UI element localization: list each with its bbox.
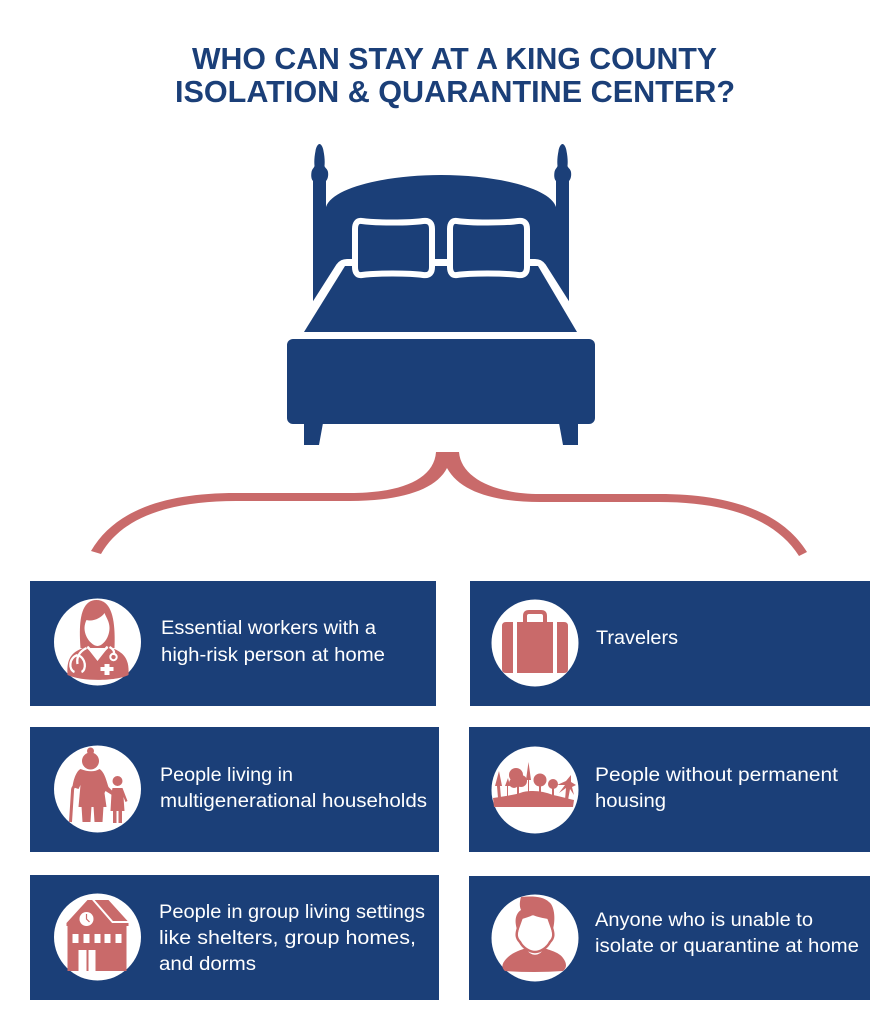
icon: building: like shelters, group homes, <box>159 928 416 949</box>
panel: people without permanent housing <box>469 727 870 852</box>
panel: essential workers <box>30 581 436 706</box>
icon: grandmother and child: People living in <box>160 765 293 786</box>
icon: building <box>54 894 425 980</box>
title: WHO CAN STAY AT A KING COUNTY <box>192 41 717 76</box>
icon: landscape <box>492 746 839 834</box>
panel: multigenerational households <box>30 727 439 852</box>
icon: man <box>492 894 859 982</box>
icon: landscape: housing <box>595 791 666 812</box>
panel: travelers <box>470 581 870 706</box>
icon: doctor <box>54 598 385 686</box>
icon: man: isolate or quarantine at home <box>595 936 859 957</box>
title: ISOLATION & QUARANTINE CENTER? <box>175 74 735 109</box>
icon: grandmother and child <box>54 746 427 832</box>
icon: doctor: Essential workers with a <box>161 618 376 639</box>
icon: bed <box>287 144 595 445</box>
icon: suitcase <box>492 600 678 686</box>
icon: suitcase: Travelers <box>596 628 678 649</box>
icon: landscape: People without permanent <box>595 765 839 786</box>
icon: grandmother and child: multigenerational households <box>160 791 427 812</box>
icon: man: Anyone who is unable to <box>595 910 813 931</box>
icon: building: People in group living settings <box>159 902 425 923</box>
icon: building: and dorms <box>159 954 256 975</box>
brace <box>91 452 807 556</box>
icon: doctor: high-risk person at home <box>161 645 385 666</box>
panel: group living settings <box>30 875 439 1000</box>
panel: unable to isolate at home <box>469 876 870 1000</box>
title <box>175 41 735 109</box>
